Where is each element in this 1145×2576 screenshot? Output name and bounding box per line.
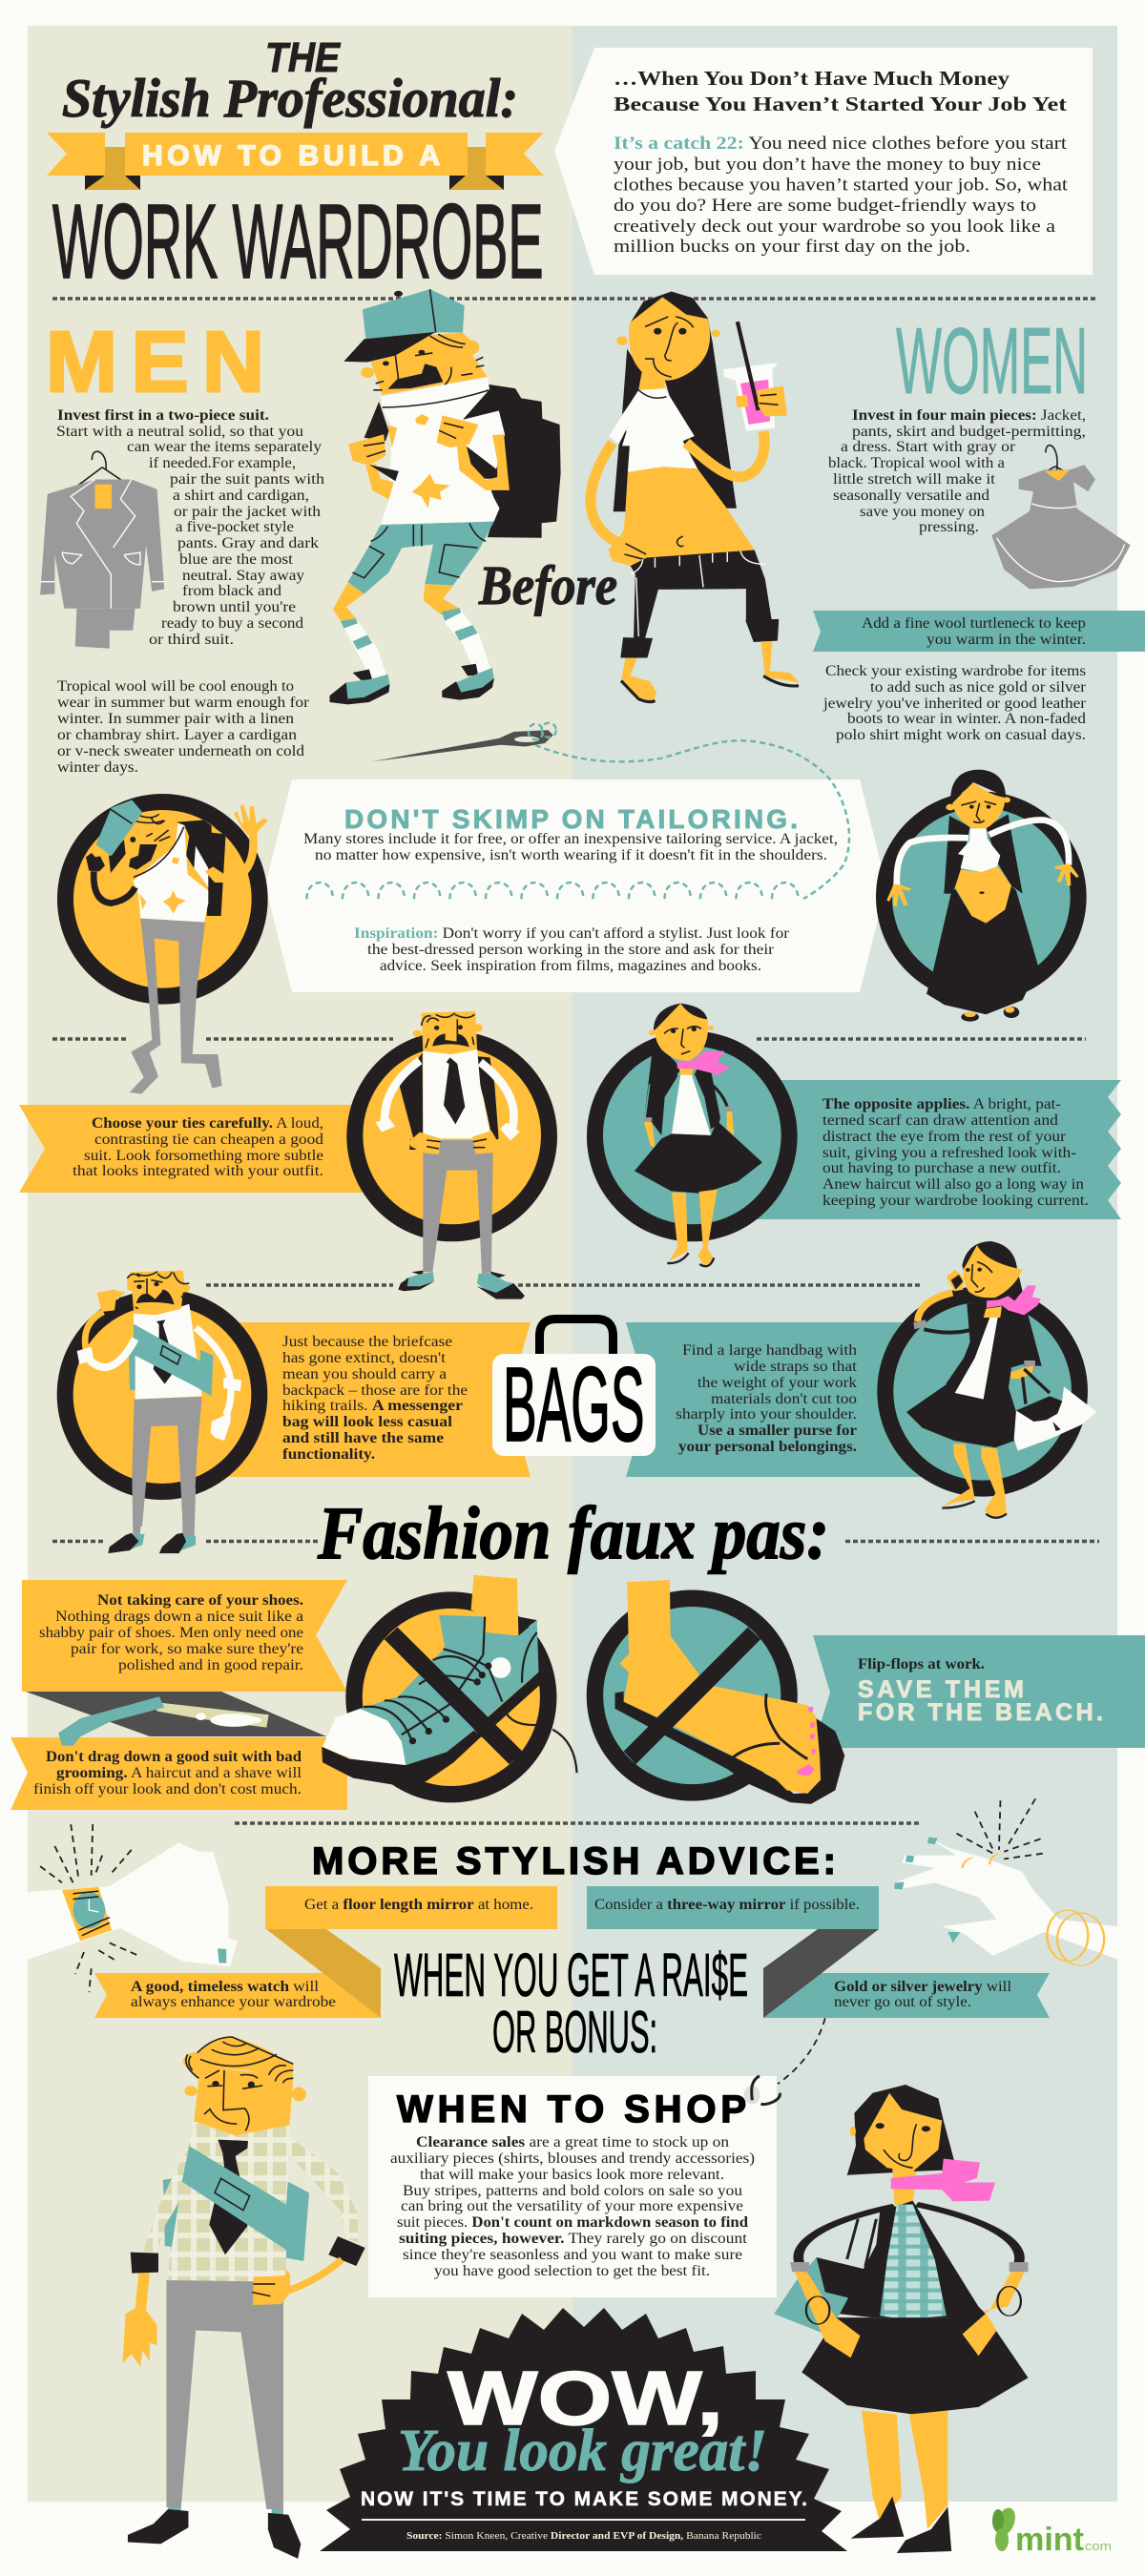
icon: hanger hook with dashed line [744,2018,825,2105]
text: tropical wool: or chambray shirt. Layer a cardigan [57,727,297,743]
text: briefcase [282,1334,468,1463]
large man legs and shoes [123,2273,301,2559]
text: briefcase: hiking trails. A messenger [282,1398,463,1414]
character: man before [329,289,561,704]
teal ribbon: jewelry [763,1929,1050,2018]
character: man tie [346,1011,557,1299]
text: women four pieces: black. Tropical wool with a [828,455,1005,471]
text: tropical wool: wear in summer but warm enough for [57,695,310,711]
text: grooming: Don't drag down a good suit with bad [46,1749,302,1765]
text: flip-flops: SAVE THEM [858,1676,1024,1703]
text: women four pieces: Invest in four main pieces: Jacket, [852,407,1086,424]
panel: women column background [572,26,1117,2502]
teal box: three-way mirror: Consider a three-way mirror if possible. [594,1897,860,1913]
text: tropical wool: winter. In summer pair with a linen [57,711,294,727]
teal ribbon: scarf [735,1080,1121,1219]
text: grooming: grooming. A haircut and a shave will [56,1765,302,1781]
text: men suit advice: or third suit. [149,632,234,648]
text: briefcase: bag will look less casual [282,1414,453,1430]
character: woman scarf [587,1004,798,1266]
text: men suit advice: Start with a neutral solid, so that you [56,424,303,440]
logo: mint.com: mint [1015,2522,1084,2558]
text: scarf: The opposite applies. A bright, pat- [822,1096,1061,1112]
text: scarf [822,1096,1089,1209]
text: men suit advice: if needed.For example, [149,455,296,471]
teal band: turtleneck: you warm in the winter. [926,632,1086,648]
intro paragraph: do you do? Here are some budget-friendly ways to [614,197,1036,216]
intro paragraph: It’s a catch 22: You need nice clothes before you start [614,135,1068,154]
inspiration text [354,925,790,974]
text: scarf: suit, giving you a refreshed look with- [822,1145,1076,1161]
text: men suit advice: from black and [182,583,281,599]
icon: razor [58,1696,269,1746]
stitched scallops [306,883,798,899]
intro paragraph [614,135,1069,257]
text: ties: Choose your ties carefully. A loud, [92,1115,323,1132]
intro heading [614,67,1067,115]
character: woman before [591,291,800,702]
icon: gray dress on hanger [991,446,1131,589]
title block [47,34,544,301]
text: existing wardrobe: polo shirt might work on casual days. [836,727,1086,743]
when to shop text: since they're seasonless and you want to make sure [403,2247,742,2263]
character: woman tailoring [876,770,1087,1022]
icon: no sneakers [322,1575,577,1802]
logo: mint.com [992,2505,1112,2558]
shadow shape under razor [26,1692,326,1736]
when to shop text: Clearance sales are a great time to stock up on [416,2134,729,2150]
text: men suit advice: or pair the jacket with [174,504,321,520]
text: briefcase: functionality. [282,1446,375,1463]
now it's time: NOW IT'S TIME TO MAKE SOME MONEY. [361,2488,807,2510]
intro heading: Because You Haven’t Started Your Job Yet [614,93,1067,115]
text: tropical wool: winter days. [57,759,138,776]
text: men suit advice: a shirt and cardigan, [173,488,309,504]
icon: gray suit on hanger [40,451,164,649]
yellow box: shoes: shabby pair of shoes. Men only need one [39,1625,303,1641]
text: men suit advice: pants. Gray and dark [177,535,319,551]
when to shop text: can bring out the versatility of your more expensive [401,2198,743,2214]
text: tropical wool [57,678,310,776]
yellow box: shoes [22,1580,347,1692]
when to shop text: Buy stripes, patterns and bold colors on sale so you [403,2183,742,2199]
intro paragraph: million bucks on your first day on the job. [614,238,970,257]
character: large woman after [774,2085,1029,2553]
teal box: three-way mirror [587,1886,879,1929]
text: women four pieces: pressing. [919,519,979,535]
heading: when you get a raise or bonus [394,1941,748,2065]
text: handbag: your personal belongings. [678,1439,857,1455]
text: tropical wool: or v-neck sweater underneath on cold [57,743,304,759]
icon: bags suitcase label [492,1319,656,1464]
text: briefcase: and still have the same [282,1430,444,1446]
text: handbag [676,1342,858,1455]
intro paragraph: clothes because you haven’t started your job. So, what [614,176,1069,195]
when to shop text: you have good selection to get the best fit. [434,2263,710,2279]
text: handbag: Use a smaller purse for [697,1423,857,1439]
text: men suit advice: neutral. Stay away [182,568,304,584]
yellow box: shoes: polished and in good repair. [118,1657,303,1673]
text: scarf: keeping your wardrobe looking current. [822,1193,1089,1209]
teal ribbon: handbag [626,1322,926,1477]
panel: intro callout [554,48,1093,275]
text: ties: that looks integrated with your outfit. [73,1163,323,1179]
heading: men: MEN [46,315,264,410]
text: grooming: finish off your look and don't cost much. [33,1781,302,1797]
yellow ribbon: briefcase [219,1322,531,1477]
character: large man after [123,2037,365,2559]
inspiration text: advice. Seek inspiration from films, magazines and books. [380,958,761,974]
text: existing wardrobe: Check your existing wardrobe for items [825,663,1086,679]
icon: needle [371,723,556,761]
when to shop text [390,2134,755,2279]
text: briefcase: Just because the briefcase [282,1334,452,1350]
text: ties [73,1115,323,1179]
text: ties: suit. Look forsomething more subtle [84,1148,323,1164]
text: flip-flops [858,1656,1103,1726]
tailoring heading: DON'T SKIMP ON TAILORING. [344,804,798,834]
text: handbag: the weight of your work [697,1375,857,1391]
when to shop text: that will make your basics look more relevant. [420,2167,724,2183]
text: men suit advice [56,407,324,648]
text: men suit advice: blue are the most [179,551,294,568]
icon: hand with rings [894,1798,1117,1965]
you look great: You look great! [398,2419,767,2483]
text: briefcase: mean you should carry a [282,1366,447,1382]
panel: tailoring [265,779,886,992]
panel: men column background [28,26,572,2502]
yellow ribbon: watch [94,1929,381,2018]
text: existing wardrobe [822,663,1087,743]
yellow box: grooming [10,1737,347,1810]
heading: more stylish advice: MORE STYLISH ADVICE: [312,1840,836,1882]
text: handbag: wide straps so that [734,1359,858,1375]
teal ribbon: jewelry: never go out of style. [834,1994,971,2010]
text: men suit advice: a five-pocket style [176,519,294,535]
inspiration text: the best-dressed person working in the store and ask for their [367,942,775,958]
yellow box: shoes: Not taking care of your shoes. [97,1592,303,1609]
teal ribbon: jewelry: Gold or silver jewelry will [834,1979,1012,1995]
text: scarf: out having to purchase a new outfit. [822,1160,1061,1176]
text: men suit advice: can wear the items separately [127,439,322,455]
wow text: WOW, [448,2356,723,2441]
yellow box: shoes: pair for work, so make sure they're [71,1641,303,1657]
teal box: flip-flops [813,1635,1145,1748]
character: man messenger legs and shoes [108,1488,196,1553]
character: man messenger bag [57,1271,267,1527]
yellow ribbon: watch: A good, timeless watch will [131,1979,320,1995]
text: women four pieces: a dress. Start with gray or [841,439,1016,455]
text: handbag: sharply into your shoulder. [676,1406,857,1423]
when to shop text: suit pieces. Don't count on markdown season to find [397,2214,748,2231]
when to shop text: auxiliary pieces (shirts, blouses and trendy accessories) [390,2150,755,2167]
teal band: turtleneck [813,611,1145,652]
yellow box: shoes: Nothing drags down a nice suit like a [55,1609,303,1625]
text: flip-flops: Flip-flops at work. [858,1656,985,1672]
ribbon: how to build a: HOW TO BUILD A [142,140,440,172]
text: scarf: Anew haircut will also go a long way in [822,1176,1084,1193]
text: handbag: materials don't cut too [711,1391,857,1407]
yellow ribbon: ties [19,1105,382,1193]
text: women four pieces: seasonally versatile and [833,488,989,504]
large man torso and head [131,2037,365,2305]
yellow box: mirror: Get a floor length mirror at home. [304,1897,533,1913]
text: men suit advice: Invest first in a two-piece suit. [57,407,269,424]
character: woman handbag [877,1241,1096,1518]
text: existing wardrobe: to add such as nice gold or silver [870,679,1087,696]
tailoring text: Many stores include it for free, or offer an inexpensive tailoring service. A jacket, [303,831,838,847]
text: scarf: distract the eye from the rest of your [822,1129,1067,1145]
text: men suit advice: ready to buy a second [161,615,303,632]
yellow box: mirror [265,1886,557,1929]
text: women four pieces: little stretch will make it [833,471,996,488]
starburst: wow [320,2308,847,2551]
tailoring text: no matter how expensive, isn't worth wearing if it doesn't fit in the shoulders. [315,847,827,863]
panel: when to shop [368,2076,777,2297]
text: existing wardrobe: boots to wear in winter. A non-faded [847,711,1086,727]
text: tropical wool: Tropical wool will be cool enough to [57,678,294,695]
source: Source: Simon Kneen, Creative Director and EVP of Design, Banana Republic [406,2530,761,2542]
text: ties: contrasting tie can cheapen a good [94,1132,323,1148]
text: handbag: Find a large handbag with [682,1342,857,1359]
teal band: turtleneck: Add a fine wool turtleneck to keep [862,615,1086,632]
tailoring text [303,831,838,863]
text: men suit advice: pair the suit pants with [170,471,324,488]
when to shop heading: WHEN TO SHOP [397,2088,746,2130]
character: man tailoring [57,794,268,1094]
title: Stylish Professional: Stylish Professional: [62,69,518,129]
text: women four pieces: save you money on [860,504,985,520]
text: briefcase: backpack – those are for the [282,1382,468,1399]
thread: dashed stitching [535,740,849,899]
heading: fashion faux pas: Fashion faux pas: [317,1491,829,1574]
text: existing wardrobe: jewelry you've inherited or good leather [822,696,1087,712]
icon: no flip-flops [587,1580,844,1804]
text: briefcase: has gone extinct, doesn't [282,1350,447,1366]
yellow ribbon: watch: always enhance your wardrobe [131,1994,336,2010]
logo: mint.com: com [1085,2539,1112,2553]
script label: Before: Before [478,554,617,616]
icon: wrist with watch [28,1824,238,1992]
intro heading: …When You Don’t Have Much Money [614,67,1010,90]
text: women four pieces [828,407,1086,535]
text: flip-flops: FOR THE BEACH. [858,1699,1103,1726]
ribbon: how to build a [47,133,544,190]
intro paragraph: your job, but you don’t have the money to buy nice [614,156,1041,175]
text: grooming [33,1749,302,1797]
text: women four pieces: pants, skirt and budget-permitting, [852,424,1086,440]
inspiration text: Inspiration: Don't worry if you can't afford a stylist. Just look for [354,925,790,942]
title: THE: THE [265,34,341,81]
text: men suit advice: brown until you're [173,599,296,615]
when to shop text: suiting pieces, however. They rarely go on discount [399,2231,748,2247]
intro paragraph: creatively deck out your wardrobe so you look like a [614,218,1055,237]
text: scarf: terned scarf can draw attention and [822,1112,1058,1129]
